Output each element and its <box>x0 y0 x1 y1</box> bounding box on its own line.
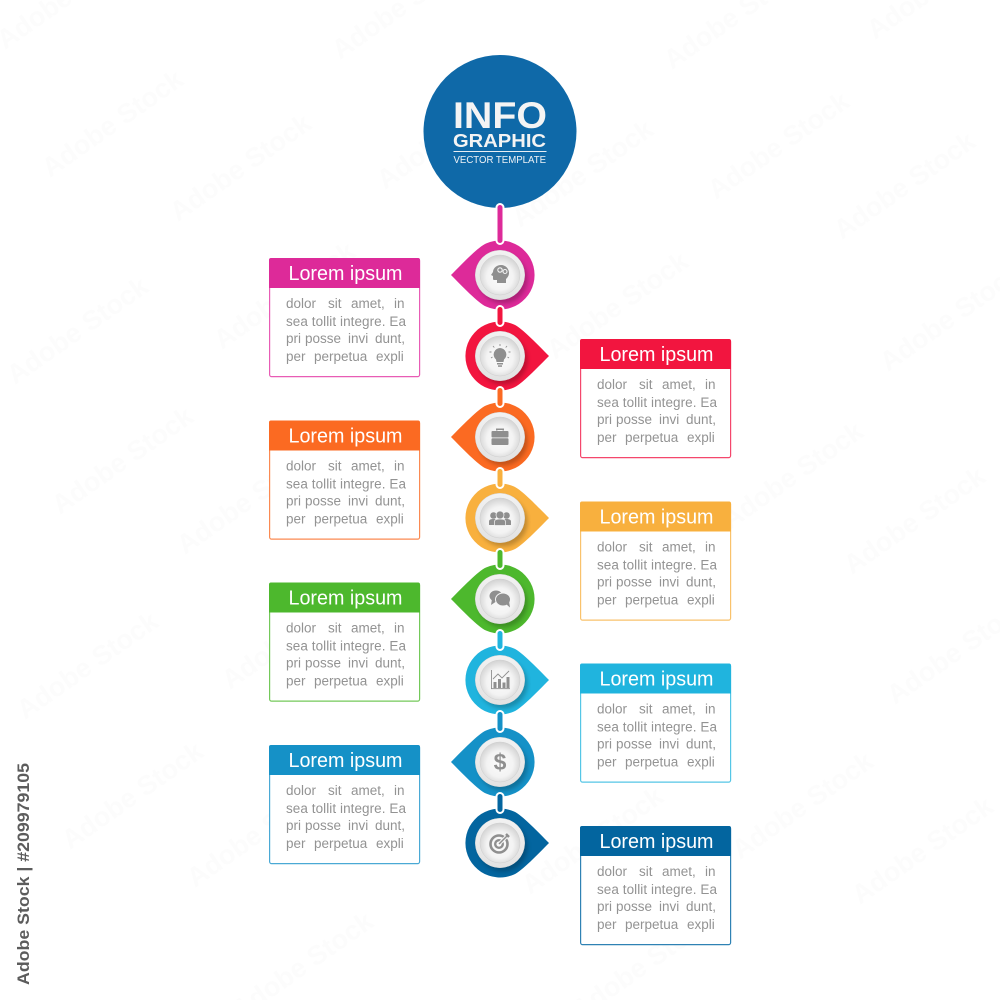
panel: step 4 text box: pri <box>597 574 612 590</box>
background watermark: Adobe Stock <box>716 415 869 535</box>
panel: step 7 text box: dolor <box>286 783 317 798</box>
panel: step 5 text box: dolor <box>286 620 317 636</box>
background watermark: Adobe Stock <box>56 735 209 855</box>
panel: step 5 text box: sit <box>328 620 342 636</box>
panel: step 6 text box: dunt, <box>686 736 716 752</box>
panel: step 5 text box: invi <box>348 656 368 670</box>
icon: group of people <box>489 511 511 526</box>
panel: step 2 text box: sit <box>639 377 653 392</box>
panel: step 5 text box <box>269 582 420 701</box>
panel: step 6 text box: posse <box>616 736 652 752</box>
panel: step 4 text box: per <box>597 592 617 608</box>
panel: step 5 text box: expli <box>376 674 404 688</box>
panel: step 7 text box: expli <box>376 836 404 851</box>
panel: step 2 text box: pri <box>597 412 612 427</box>
panel: step 7 text box: dunt, <box>375 818 405 833</box>
panel: step 2 text box: invi <box>659 412 679 427</box>
panel: step 7 text box: amet, <box>351 783 385 798</box>
panel: step 4 text box: invi <box>659 574 679 590</box>
panel: step 6 text box: expli <box>687 754 715 770</box>
background watermark: Adobe Stock <box>516 780 669 900</box>
panel: step 7 text box: per <box>286 836 306 851</box>
panel: step 8 text box <box>580 826 731 945</box>
panel: step 2 text box <box>580 339 731 458</box>
icon: speech bubbles <box>490 590 510 608</box>
panel: step 6 text box: amet, <box>662 702 696 716</box>
panel: step 7 text box: sit <box>328 783 342 798</box>
background watermark: Adobe Stock <box>506 113 659 233</box>
background watermark: Adobe Stock <box>371 75 524 195</box>
panel: step 6 text box: per <box>597 754 617 770</box>
step 3 pin: briefcase icon <box>451 402 535 472</box>
stock credit text: Adobe Stock | #209979105 <box>14 763 33 985</box>
panel: step 7 text box <box>269 745 420 864</box>
panel: step 8 text box: sit <box>639 864 653 879</box>
background watermark: Adobe Stock <box>216 575 369 695</box>
panel: step 1 text box: sea tollit integre. Ea <box>286 314 406 329</box>
background watermark: Adobe Stock <box>726 745 879 865</box>
panel: step 8 text box: sea tollit integre. Ea <box>597 882 717 897</box>
panel: step 3 text box: sit <box>328 458 342 474</box>
connector: step 6 to 7 <box>498 712 502 731</box>
panel: step 3 text box <box>269 420 420 539</box>
panel: step 3 text box: expli <box>376 512 404 526</box>
panel: step 6 text box <box>580 664 731 782</box>
background watermark: Adobe Stock <box>838 460 991 580</box>
background watermark: Adobe Stock <box>846 790 999 910</box>
panel: step 4 text box: dolor <box>597 540 628 554</box>
background watermark: Adobe Stock <box>181 773 334 893</box>
panel: step 8 text box: perpetua <box>625 917 679 932</box>
panel: step 6 text box: Lorem ipsum <box>600 668 714 690</box>
panel: step 4 text box: perpetua <box>625 592 679 608</box>
panel: step 5 text box: per <box>286 674 306 688</box>
panel: step 5 text box: sea tollit integre. Ea <box>286 638 406 654</box>
panel: step 6 text box: sea tollit integre. Ea <box>597 720 717 734</box>
panel: step 3 text box: amet, <box>351 458 385 474</box>
panel: step 4 text box: sea tollit integre. Ea <box>597 558 717 572</box>
icon: briefcase <box>492 428 508 445</box>
panel: step 8 text box: dunt, <box>686 899 716 914</box>
panel: step 3 text box: Lorem ipsum <box>288 426 402 448</box>
connector: step 2 to 3 <box>498 388 502 406</box>
connector: step 4 to 5 <box>498 550 502 568</box>
title circle: GRAPHIC <box>453 131 546 151</box>
connector: step 7 to 8 <box>498 794 502 812</box>
panel: step 8 text box: amet, <box>662 864 696 879</box>
panel: step 8 text box: pri <box>597 899 612 914</box>
connector: title to step 1 <box>498 205 502 243</box>
panel: step 4 text box <box>580 502 731 620</box>
background watermark: Adobe Stock <box>702 85 855 205</box>
panel: step 1 text box: Lorem ipsum <box>288 263 402 285</box>
panel: step 6 text box: perpetua <box>625 754 679 770</box>
panel: step 7 text box: invi <box>348 818 368 833</box>
icon: dollar sign: $ <box>494 749 507 775</box>
panel: step 1 text box: in <box>394 296 405 311</box>
background watermark: Adobe Stock <box>36 63 189 183</box>
panel: step 2 text box: per <box>597 430 617 445</box>
background watermark: Adobe Stock <box>164 107 317 227</box>
panel: step 6 text box: invi <box>659 736 679 752</box>
panel: step 8 text box: per <box>597 917 617 932</box>
step 2 pin: light bulb icon <box>465 322 549 390</box>
panel: step 5 text box: Lorem ipsum <box>288 588 402 610</box>
background watermark: Adobe Stock <box>46 400 199 520</box>
title circle: VECTOR TEMPLATE <box>454 154 546 166</box>
panel: step 5 text box: in <box>394 620 405 636</box>
panel: step 3 text box: in <box>394 458 405 474</box>
panel: step 8 text box: in <box>705 864 716 879</box>
panel: step 7 text box: in <box>394 783 405 798</box>
panel: step 3 text box: per <box>286 512 306 526</box>
panel: step 4 text box: dunt, <box>686 574 716 590</box>
panel: step 1 text box: invi <box>348 331 368 346</box>
panel: step 3 text box: dolor <box>286 458 317 474</box>
panel: step 2 text box: sea tollit integre. Ea <box>597 395 717 410</box>
background watermark: Adobe Stock <box>541 245 694 365</box>
connector: step 3 to 4 <box>498 469 502 487</box>
connector: step 5 to 6 <box>498 631 502 649</box>
icon: target with arrow <box>490 834 509 852</box>
title circle: INFO <box>453 95 547 136</box>
panel: step 3 text box: pri <box>286 494 301 508</box>
panel: step 3 text box: posse <box>305 494 341 508</box>
panel: step 4 text box: Lorem ipsum <box>600 506 714 528</box>
panel: step 2 text box: dolor <box>597 377 628 392</box>
panel: step 2 text box: expli <box>687 430 715 445</box>
background watermark: Adobe Stock <box>171 440 324 560</box>
panel: step 5 text box: posse <box>305 656 341 670</box>
step 7 pin: dollar icon <box>451 728 535 796</box>
panel: step 6 text box: pri <box>597 736 612 752</box>
step 5 pin: speech bubbles icon <box>451 564 535 634</box>
panel: step 8 text box: invi <box>659 899 679 914</box>
panel: step 8 text box: expli <box>687 917 715 932</box>
panel: step 2 text box: Lorem ipsum <box>600 344 714 366</box>
panel: step 4 text box: expli <box>687 592 715 608</box>
title circle <box>424 55 576 208</box>
panel: step 4 text box: amet, <box>662 540 696 554</box>
panel: step 5 text box: perpetua <box>314 674 368 688</box>
panel: step 3 text box: dunt, <box>375 494 405 508</box>
panel: step 8 text box: posse <box>616 899 652 914</box>
panel: step 2 text box: posse <box>616 412 652 427</box>
panel: step 2 text box: perpetua <box>625 430 679 445</box>
panel: step 7 text box: posse <box>305 818 341 833</box>
icon: light bulb <box>490 344 510 367</box>
background watermark: Adobe Stock <box>828 125 981 245</box>
panel: step 3 text box: invi <box>348 494 368 508</box>
panel: step 1 text box: pri <box>286 331 301 346</box>
panel: step 7 text box: pri <box>286 818 301 833</box>
icon: head with gears <box>491 265 509 283</box>
panel: step 1 text box: sit <box>328 296 342 311</box>
panel: step 3 text box: sea tollit integre. Ea <box>286 476 406 492</box>
panel: step 1 text box: dolor <box>286 296 317 311</box>
panel: step 5 text box: amet, <box>351 620 385 636</box>
panel: step 4 text box: sit <box>639 540 653 554</box>
connector: step 1 to 2 <box>498 307 502 325</box>
panel: step 5 text box: dunt, <box>375 656 405 670</box>
background watermark: Adobe Stock <box>1 270 154 390</box>
panel: step 4 text box: in <box>705 540 716 554</box>
panel: step 6 text box: sit <box>639 702 653 716</box>
panel: step 2 text box: amet, <box>662 377 696 392</box>
panel: step 8 text box: dolor <box>597 864 628 879</box>
panel: step 5 text box: pri <box>286 656 301 670</box>
panel: step 1 text box: per <box>286 349 306 364</box>
panel: step 1 text box <box>269 258 420 377</box>
panel: step 3 text box: perpetua <box>314 512 368 526</box>
background watermark: Adobe Stock <box>208 235 361 355</box>
panel: step 8 text box: Lorem ipsum <box>600 831 714 853</box>
panel: step 1 text box: expli <box>376 349 404 364</box>
background watermark: Adobe Stock <box>11 605 164 725</box>
panel: step 6 text box: in <box>705 702 716 716</box>
panel: step 6 text box: dolor <box>597 702 628 716</box>
panel: step 7 text box: perpetua <box>314 836 368 851</box>
icon: growth chart <box>491 670 510 689</box>
panel: step 7 text box: Lorem ipsum <box>288 750 402 772</box>
step 1 pin: head icon <box>451 240 535 310</box>
panel: step 1 text box: amet, <box>351 296 385 311</box>
panel: step 2 text box: dunt, <box>686 412 716 427</box>
panel: step 2 text box: in <box>705 377 716 392</box>
panel: step 1 text box: perpetua <box>314 349 368 364</box>
step 6 pin: chart icon <box>465 646 549 714</box>
panel: step 4 text box: posse <box>616 574 652 590</box>
panel: step 1 text box: dunt, <box>375 331 405 346</box>
step 4 pin: people icon <box>465 484 549 552</box>
panel: step 1 text box: posse <box>305 331 341 346</box>
panel: step 7 text box: sea tollit integre. Ea <box>286 801 406 816</box>
step 8 pin: target icon <box>465 808 549 878</box>
